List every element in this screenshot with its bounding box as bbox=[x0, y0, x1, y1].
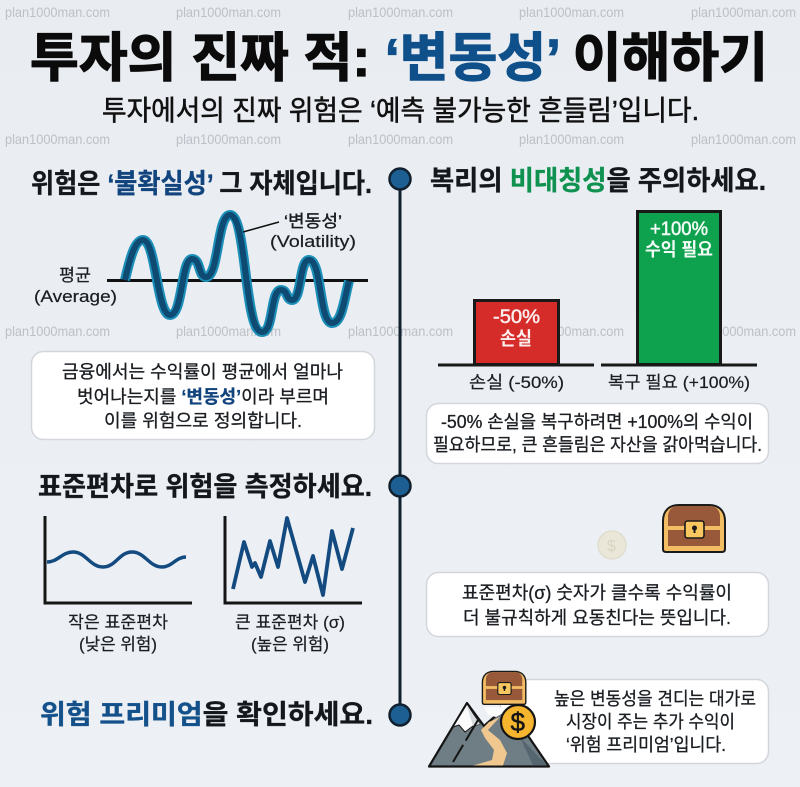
label: small deviation bbox=[68, 613, 168, 654]
icon: faded coin: $ bbox=[607, 538, 616, 555]
bar: loss: 손실 bbox=[500, 328, 532, 349]
icon: treasure chest bbox=[663, 505, 725, 552]
watermarks: plan1000man.com bbox=[519, 4, 624, 20]
label: small deviation: 작은 표준편차 bbox=[68, 613, 168, 632]
title: 투자의 진짜 적: ‘변동성’ 이해하기 bbox=[30, 29, 768, 88]
text box: standard deviation meaning: 표준편차(σ) 숫자가 클수록 수익률이 bbox=[462, 583, 732, 603]
icon: faded coin bbox=[598, 531, 626, 559]
watermarks: plan1000man.com bbox=[176, 323, 281, 339]
baseline bbox=[438, 364, 757, 366]
watermarks: plan1000man.com bbox=[176, 131, 281, 147]
bar: loss bbox=[474, 300, 558, 364]
text box: recovery explanation: -50% 손실을 복구하려면 +100%의 수익이 bbox=[441, 412, 753, 432]
heading: asymmetry: 복리의 비대칭성을 주의하세요. bbox=[430, 166, 766, 196]
text box: recovery explanation bbox=[426, 404, 768, 464]
text box: recovery explanation: 필요하므로, 큰 흔들림은 자산을 갉아먹습니다. bbox=[433, 435, 762, 455]
icon: small chest bbox=[482, 671, 526, 704]
heading: standard deviation: 표준편차로 위험을 측정하세요. bbox=[38, 472, 372, 502]
watermarks: plan1000man.com bbox=[519, 323, 624, 339]
label: volatility: (Volatility) bbox=[270, 232, 356, 251]
text box: risk premium bbox=[500, 680, 768, 764]
label: small deviation: (낮은 위험) bbox=[79, 635, 157, 654]
watermarks: plan1000man.com bbox=[348, 323, 453, 339]
watermarks: plan1000man.com bbox=[519, 131, 624, 147]
icon: dollar coin: $ bbox=[510, 707, 526, 737]
text box: volatility definition: 벗어나는지를 ‘변동성’이라 부르며 bbox=[77, 387, 329, 407]
label: large deviation: (높은 위험) bbox=[251, 635, 329, 654]
central timeline bbox=[390, 168, 410, 726]
bar: recovery: +100% bbox=[650, 219, 708, 240]
label: large deviation bbox=[235, 613, 345, 654]
heading: risk premium: 위험 프리미엄을 확인하세요. bbox=[40, 700, 373, 730]
watermarks bbox=[5, 4, 796, 339]
watermarks: plan1000man.com bbox=[176, 4, 281, 20]
text box: volatility definition: 금융에서는 수익률이 평균에서 얼마나 bbox=[62, 362, 343, 382]
panel: compounding asymmetry bbox=[426, 166, 768, 464]
volatility chart bbox=[107, 215, 368, 332]
label: large deviation: 큰 표준편차 (σ) bbox=[235, 613, 345, 632]
bar: recovery: 수익 필요 bbox=[645, 239, 713, 260]
text box: standard deviation meaning bbox=[426, 572, 768, 636]
label: volatility: ‘변동성’ bbox=[284, 212, 342, 231]
text box: risk premium: 시장이 주는 추가 수익이 bbox=[566, 712, 735, 732]
axis label: loss: 손실 (-50%) bbox=[469, 373, 564, 392]
panel: uncertainty bbox=[31, 169, 374, 440]
icon: chest on mountain with coin bbox=[429, 671, 549, 766]
chart: small deviation bbox=[45, 516, 192, 603]
text box: standard deviation meaning: 더 불규칙하게 요동친다는 뜻입니다. bbox=[463, 608, 731, 628]
watermarks: plan1000man.com bbox=[348, 131, 453, 147]
label: volatility bbox=[270, 212, 356, 251]
text box: volatility definition bbox=[32, 352, 374, 440]
icon: mountain bbox=[429, 703, 549, 766]
watermarks: plan1000man.com bbox=[5, 4, 110, 20]
panel: standard deviation bbox=[38, 472, 372, 654]
callout line: volatility bbox=[243, 222, 279, 232]
bar: recovery bbox=[638, 212, 720, 364]
bar: loss: -50% bbox=[493, 307, 540, 328]
label: average bbox=[34, 266, 117, 306]
text box: risk premium: 높은 변동성을 견디는 대가로 bbox=[554, 689, 756, 709]
watermarks: plan1000man.com bbox=[5, 131, 110, 147]
label: average: 평균 bbox=[59, 266, 91, 285]
text box: risk premium: ‘위험 프리미엄’입니다. bbox=[566, 735, 726, 755]
label: average: (Average) bbox=[34, 287, 117, 306]
chart: large deviation bbox=[225, 516, 362, 603]
axis label: recovery: 복구 필요 (+100%) bbox=[608, 373, 750, 392]
heading: uncertainty: 위험은 ‘불확실성’ 그 자체입니다. bbox=[31, 169, 372, 199]
text box: volatility definition: 이를 위험으로 정의합니다. bbox=[104, 411, 302, 431]
watermarks: plan1000man.com bbox=[348, 4, 453, 20]
watermarks: plan1000man.com bbox=[5, 323, 110, 339]
subtitle: 투자에서의 진짜 위험은 ‘예측 불가능한 흔들림’입니다. bbox=[102, 95, 699, 126]
